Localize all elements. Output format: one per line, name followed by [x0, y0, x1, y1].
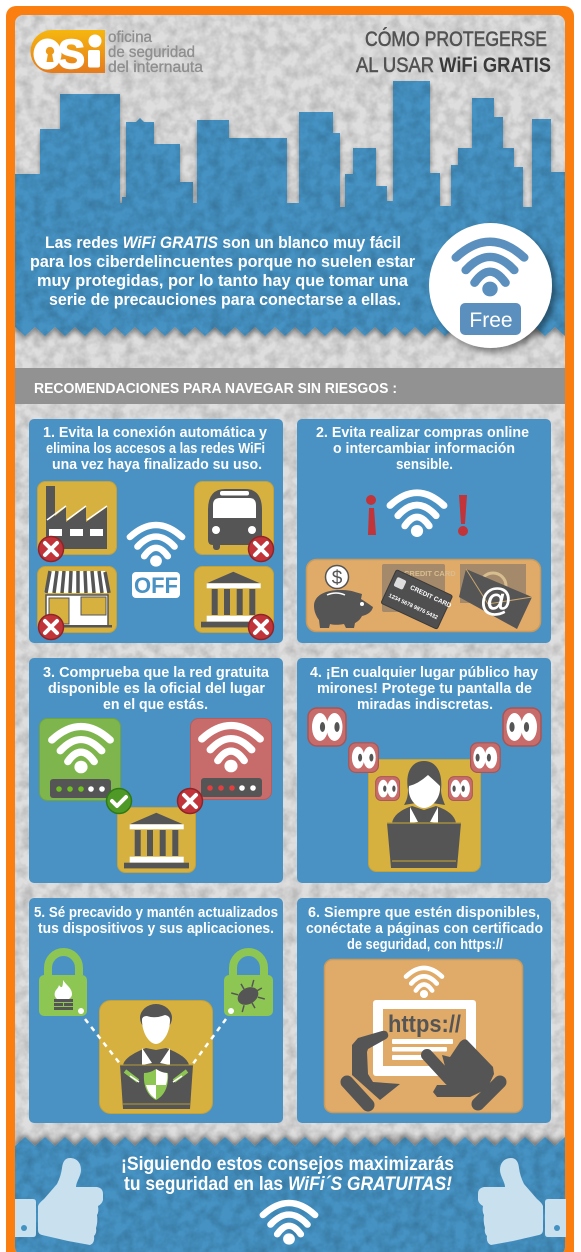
icon: woman with laptop [368, 760, 480, 872]
icon: left hand [347, 1031, 400, 1105]
icon: credit card: CREDIT CARD [409, 584, 453, 610]
dashed connection lines [85, 1019, 226, 1065]
icon: small eyes left [376, 777, 400, 801]
icon: wifi off: OFF [134, 573, 178, 598]
intro text: Las redes WiFi GRATIS son un blanco muy fácil [45, 233, 401, 252]
footer text: tu seguridad en las WiFi´S GRATUITAS! [124, 1174, 452, 1195]
icon: footer wifi [263, 1203, 315, 1245]
panel 4: onlookers: miradas indiscretas. [357, 697, 493, 713]
panel 3: official network [29, 658, 283, 883]
icon: legit router [40, 718, 120, 800]
panel 3: official network: en el que estás. [103, 697, 208, 713]
icon: large eyes left [308, 708, 346, 746]
icon: reject badge [178, 788, 202, 814]
logo OSI: del internauta [108, 59, 203, 76]
panel 4: onlookers: mirones! Protege tu pantalla de [317, 681, 532, 697]
icon: email: @ [480, 582, 512, 618]
icon: bus [194, 482, 274, 562]
panel 6: https [297, 898, 551, 1123]
icon: firewall padlock [39, 952, 87, 1016]
section heading band [15, 368, 565, 404]
icon: wifi with warning marks [366, 493, 468, 537]
panel 5: keep devices updated: 5. Sé precavido y mantén actualizados [34, 905, 278, 921]
panel strip: money, card, mail [306, 560, 540, 632]
icon: right hand [427, 1039, 500, 1104]
icon: factory [38, 482, 116, 562]
icon: malware padlock [224, 952, 273, 1016]
icon: tablet with https [324, 960, 522, 1112]
footer band [15, 1137, 565, 1252]
icon: fake router [190, 718, 272, 800]
panel 1: automatic connection: elimina los accesos a las redes WiFi [46, 441, 265, 457]
section heading band: RECOMENDACIONES PARA NAVEGAR SIN RIESGOS : [34, 381, 397, 397]
panel 3: official network: disponible es la oficial del lugar [48, 681, 265, 697]
icon: credit card [381, 564, 456, 631]
logo OSI: O [34, 31, 61, 77]
panel 1: automatic connection [29, 419, 283, 643]
intro text [30, 233, 415, 309]
icon: credit card: CREDIT CARD [404, 569, 456, 578]
free wifi badge [429, 223, 552, 348]
panel 5: keep devices updated: tus dispositivos y sus aplicaciones. [38, 921, 274, 937]
title [356, 28, 551, 77]
logo OSI: oficina [108, 29, 152, 46]
icon: thumb up right [478, 1158, 566, 1245]
panel 2: online purchases [297, 419, 551, 643]
logo OSI: S [58, 31, 85, 77]
icon: piggy bank [314, 566, 373, 628]
panel 6: https: 6. Siempre que estén disponibles, [308, 905, 540, 921]
intro text: para los ciberdelincuentes porque no suelen estar [30, 252, 415, 271]
panel 1: automatic connection: 1. Evita la conexión automática y [43, 425, 267, 441]
intro text: serie de precauciones para conectarse a ellas. [49, 290, 401, 309]
footer text [121, 1154, 454, 1195]
panel 2: online purchases: 2. Evita realizar compras online [316, 425, 529, 441]
panel 6: https: de seguridad, con https:// [347, 937, 503, 953]
icon: wifi off [130, 525, 182, 598]
title: AL USAR WiFi GRATIS [356, 54, 551, 77]
panel 1: automatic connection: una vez haya finalizado su uso. [52, 457, 262, 473]
panel 5: keep devices updated [29, 898, 283, 1123]
icon: official venue [118, 808, 196, 872]
intro text: muy protegidas, por lo tanto hay que tomar una [37, 271, 409, 290]
icon: medium eyes right [471, 743, 500, 772]
footer text: ¡Siguiendo estos consejos maximizarás [121, 1154, 454, 1175]
icon: medium eyes left [349, 743, 378, 772]
icon: large eyes right [503, 708, 541, 746]
icon: piggy bank: $ [332, 568, 343, 589]
logo OSI: de seguridad [108, 44, 195, 61]
icon: email [459, 564, 532, 629]
icon: small eyes right [448, 777, 472, 801]
panel 3: official network: 3. Comprueba que la red gratuita [43, 665, 270, 681]
panel 4: onlookers: 4. ¡En cualquier lugar público hay [310, 665, 538, 681]
icon: bank [194, 566, 274, 640]
panel 4: onlookers [297, 658, 551, 883]
skyline header [15, 81, 565, 336]
icon: check badge [106, 788, 132, 814]
icon: man with protected laptop [100, 1000, 212, 1114]
icon: shop [38, 566, 116, 640]
panel 6: https: conéctate a páginas con certificado [306, 921, 543, 937]
panel 2: online purchases: o intercambiar información [333, 441, 515, 457]
title: CÓMO PROTEGERSE [365, 28, 547, 51]
icon: thumb up left [15, 1158, 103, 1245]
icon: credit card: 1234 5678 9876 5432 [387, 593, 439, 621]
logo OSI [30, 29, 203, 77]
free wifi badge: Free [469, 309, 513, 332]
icon: tablet with https: https:// [388, 1011, 461, 1038]
panel 2: online purchases: sensible. [396, 457, 453, 473]
